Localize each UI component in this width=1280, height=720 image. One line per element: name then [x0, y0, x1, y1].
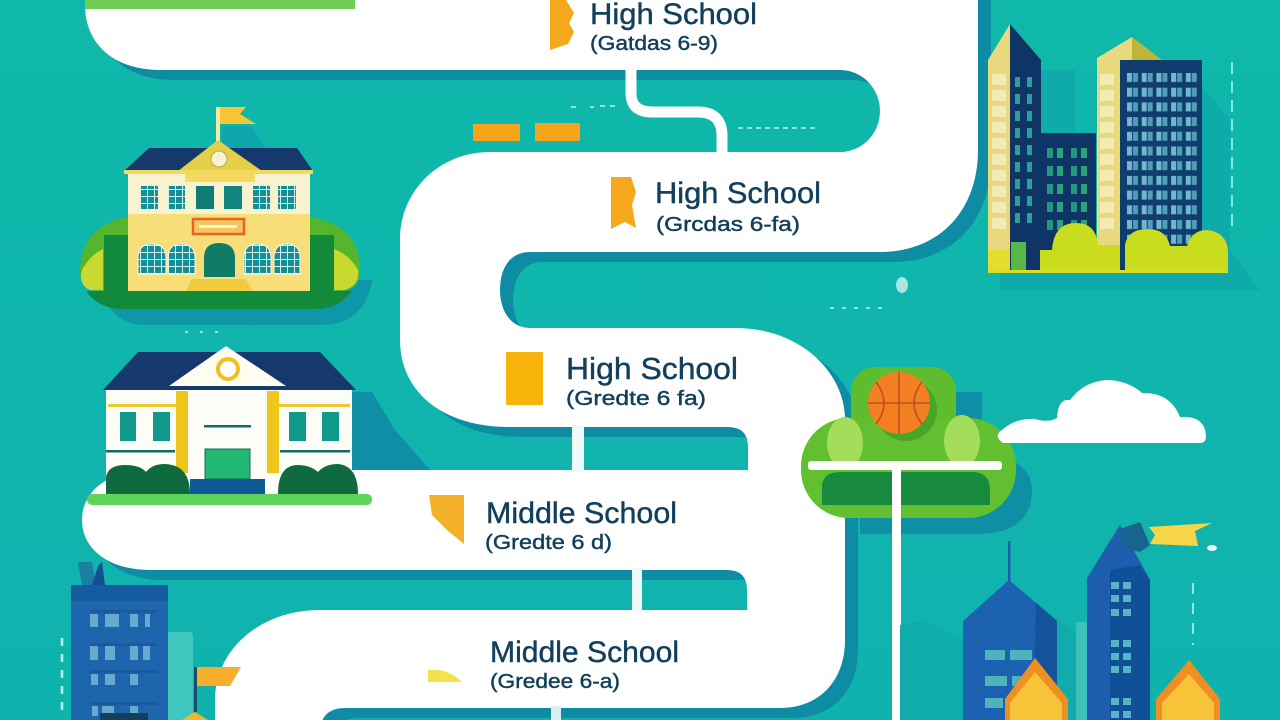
mound highlights: [81, 249, 358, 290]
tower windows: [985, 650, 1032, 708]
sign: [193, 219, 244, 234]
tower dark side: [1033, 603, 1057, 720]
subtext: grades 3: (Gredte 6 fa): [566, 388, 706, 410]
label: high school 1: [550, 0, 757, 55]
label: high school 2: [611, 177, 821, 236]
green canopy top: [851, 367, 956, 457]
tower 1 windows: [1015, 75, 1033, 230]
winding white road: [82, 0, 978, 720]
yellow bands: [108, 404, 178, 407]
buildings: bottom right: [900, 522, 1220, 720]
house 2: [1156, 660, 1220, 720]
tower top: [71, 585, 168, 601]
chimney: [78, 562, 96, 585]
light foliage: [827, 417, 863, 469]
upper wall: [128, 171, 310, 215]
tower windows: [90, 614, 150, 716]
building: yellow school: [80, 107, 372, 325]
icon: basketball tree: [801, 367, 1032, 720]
flag pole: [194, 667, 197, 712]
pale side building: [168, 632, 193, 720]
green block: [1011, 242, 1026, 270]
pediment: [169, 346, 286, 386]
yellow flag: [1149, 523, 1212, 546]
door: [205, 449, 250, 479]
clock: [211, 151, 227, 167]
dark foliage: [822, 472, 990, 505]
dashed line: [1192, 583, 1194, 645]
mound shadow: [100, 280, 372, 325]
icon: bookmark 5: [428, 670, 462, 682]
icon: bookmark 3: [506, 352, 543, 405]
subtext: grades 1: (Gatdas 6-9): [590, 33, 718, 55]
dark lintel: [204, 425, 251, 428]
tower 2 navy: [1120, 60, 1202, 270]
heading: high school 3: High School: [566, 351, 738, 386]
heading: middle school 2: Middle School: [490, 636, 679, 669]
crossbar: [808, 461, 1002, 470]
ball shadow: [875, 379, 937, 441]
windows: [120, 412, 339, 441]
lower wall: [128, 214, 310, 291]
tower 2 cream side: [1097, 37, 1132, 272]
green canopy: [801, 418, 1016, 518]
flag: [220, 107, 256, 124]
tower 1 navy: [1010, 24, 1096, 272]
road connectors: [556, 68, 722, 720]
small white dashes: [142, 106, 890, 332]
buildings shadow: [900, 580, 1085, 720]
house roof: [182, 712, 208, 720]
upper windows: [140, 186, 296, 209]
lower arched windows: [138, 244, 300, 274]
heading: high school 2: High School: [655, 177, 821, 210]
building shadow: [352, 392, 430, 470]
pole: [892, 470, 901, 720]
mound base: [86, 235, 352, 309]
small marker dot: [896, 277, 908, 293]
dashed line: [1231, 62, 1233, 230]
bushes: [106, 464, 358, 494]
label: high school 3: [506, 351, 738, 410]
label: middle school 2: [428, 636, 679, 693]
cloud: [998, 380, 1206, 443]
lawn strip: [87, 494, 372, 505]
tower door: [100, 713, 148, 720]
columns: [176, 391, 188, 473]
tall tower: [1087, 525, 1150, 720]
green strip at top of road: [85, 0, 355, 9]
emblem: [218, 359, 238, 379]
roof: [103, 352, 356, 390]
tall tower windows: [1111, 582, 1131, 718]
basketball: [868, 372, 930, 434]
door: [204, 243, 235, 277]
orange flag: [197, 667, 241, 686]
window bands: [90, 610, 158, 705]
tower 1 cream side: [988, 24, 1010, 272]
walkway: [190, 479, 265, 494]
buildings: bottom left: [62, 562, 241, 720]
subtext: grades 4: (Gredte 6 d): [485, 532, 612, 554]
subtext: grades 2: (Grcdas 6-fa): [656, 214, 800, 236]
tower 2 roof: [1132, 37, 1162, 60]
dotted line: [61, 638, 63, 716]
tiny cloud: [1207, 545, 1217, 551]
building: city towers: [988, 24, 1260, 290]
icon: bookmark 2: [611, 177, 636, 229]
roof: [124, 148, 313, 171]
blob shadow: [860, 392, 1032, 534]
orange bars: [473, 123, 580, 141]
flag pole: [216, 107, 220, 145]
icon: bookmark 1: [550, 0, 574, 50]
towers shadow: [1000, 70, 1260, 290]
icon: bookmark 4: [429, 495, 464, 544]
heading: middle school 1: Middle School: [486, 497, 677, 530]
antenna: [1008, 541, 1010, 581]
tower 2 windows: [1126, 72, 1198, 247]
pale strip: [1076, 622, 1087, 720]
label: middle school 1: [429, 495, 677, 554]
flag shadow: [222, 126, 268, 150]
frieze: [124, 170, 313, 174]
house 1: [1005, 658, 1068, 720]
pediment: [178, 140, 262, 171]
walls: [106, 390, 352, 475]
yellow-green bushes: [1040, 223, 1228, 272]
apartment tower: [71, 585, 168, 720]
blue tower: [963, 580, 1057, 720]
green mound: [80, 217, 360, 291]
road shadow: [95, 0, 991, 720]
base strip: [988, 250, 1010, 272]
steps: [186, 279, 252, 291]
subtext: grades 5: (Gredee 6-a): [490, 671, 620, 693]
tower cap: [1117, 522, 1150, 552]
building: white school: [87, 346, 430, 505]
